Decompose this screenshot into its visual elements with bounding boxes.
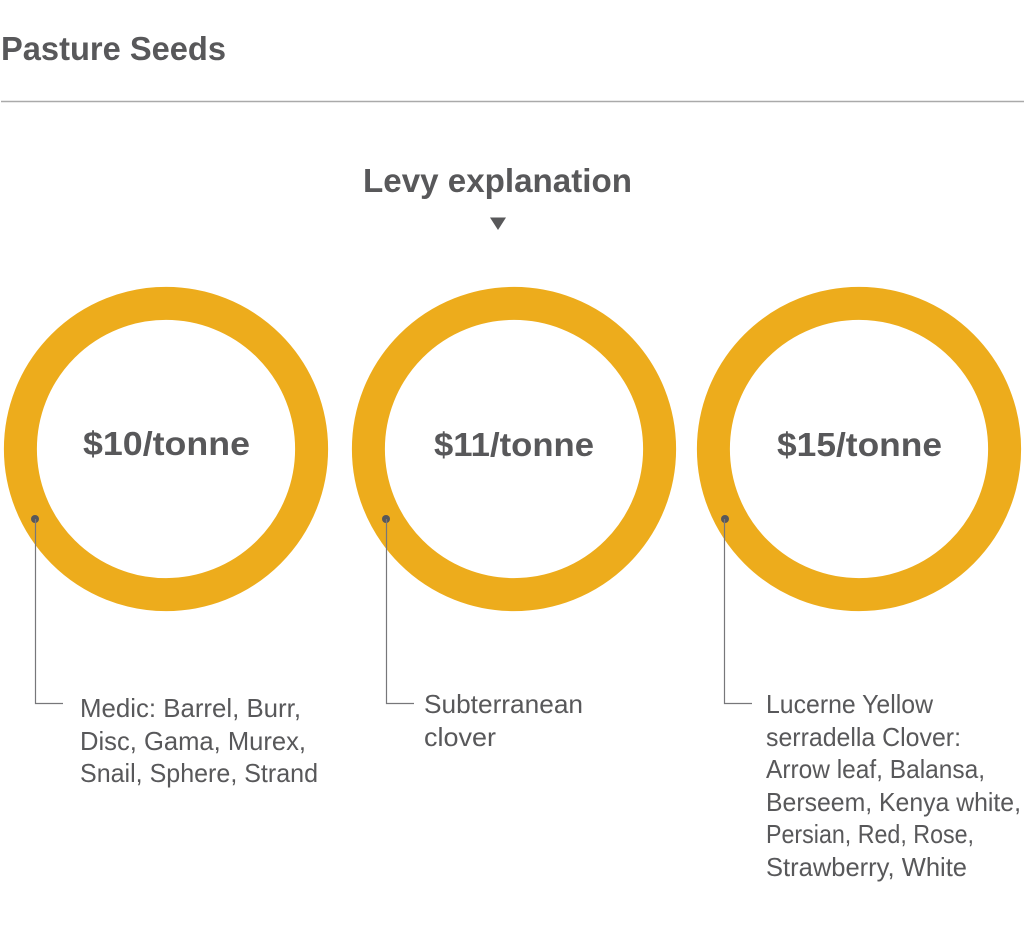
leader line: subterranean clover <box>382 515 414 704</box>
leader line: medic <box>31 515 63 704</box>
ring: $15 per tonne <box>713 303 1005 595</box>
text: subterranean clover: clover <box>424 722 496 752</box>
text: lucerne and clover varieties <box>766 689 1021 882</box>
text: lucerne and clover varieties: serradella Clover: <box>766 722 961 752</box>
ring value: $10: $10/tonne <box>83 425 250 462</box>
ring: $11 per tonne <box>368 303 660 595</box>
text: lucerne and clover varieties: Arrow leaf, Balansa, <box>766 754 985 784</box>
text: medic varieties <box>80 693 318 788</box>
ring value: $15: $15/tonne <box>777 426 942 463</box>
text: subterranean clover <box>424 689 583 752</box>
ring value: $11: $11/tonne <box>434 426 594 463</box>
leader line: lucerne and clover <box>721 515 752 704</box>
text: medic varieties: Medic: Barrel, Burr, <box>80 693 301 723</box>
text: lucerne and clover varieties: Lucerne Yellow <box>766 689 933 719</box>
heading: levy explanation: Levy explanation <box>363 162 632 199</box>
text: subterranean clover: Subterranean <box>424 689 583 719</box>
text: lucerne and clover varieties: Persian, Red, Rose, <box>766 819 974 849</box>
text: medic varieties: Disc, Gama, Murex, <box>80 726 306 756</box>
text: lucerne and clover varieties: Strawberry, White <box>766 852 967 882</box>
icon: down arrow <box>490 218 506 230</box>
title: Pasture Seeds <box>1 30 226 67</box>
ring: $10 per tonne <box>20 303 312 595</box>
text: medic varieties: Snail, Sphere, Strand <box>80 758 318 788</box>
